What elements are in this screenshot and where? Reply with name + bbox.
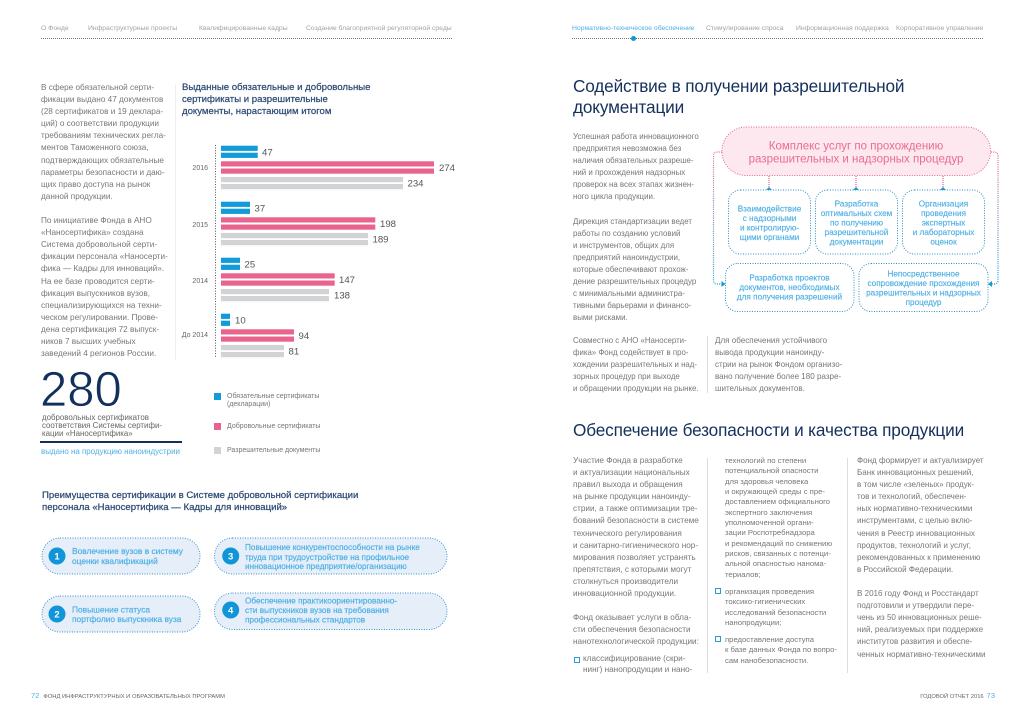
text column: safety part 1: классифицирование (скри- (583, 654, 685, 662)
legend (214, 392, 320, 454)
text column: safety part 3: Банк инновационных решений, (857, 468, 974, 477)
text column: safety part 1: мирования позволяет устранять (573, 553, 696, 562)
pill 4: сти выпускников вузов на требования (245, 606, 389, 615)
pill 4: 4 (228, 606, 234, 616)
box: interaction: Взаимодействие (738, 204, 802, 214)
bars: 2014: 138 (334, 290, 350, 302)
callout description: добровольных сертификатов (42, 413, 149, 422)
legend: Разрешительные документы (227, 446, 320, 454)
pill 3 (214, 538, 447, 574)
bars: 2014: 147 (339, 275, 355, 286)
box: interaction: и контролирую- (740, 224, 799, 232)
text block: joint work: зорных процедур при выходе (573, 372, 680, 381)
pill 2: Повышение статуса (72, 604, 150, 614)
text column: safety part 2: териалов; (725, 570, 761, 579)
text column: safety part 2: для здоровья человека (725, 477, 808, 486)
bars: 2016: 47 (262, 148, 273, 158)
text block: permit intro: тивными барьерами и финансо- (573, 301, 691, 310)
navigation: left page sections: Инфраструктурные проекты (88, 25, 177, 32)
callout description: кации «Наносертифика» (42, 429, 133, 438)
legend: (декларации) (227, 400, 270, 408)
text column: safety part 3: В 2016 году Фонд и Росстандарт (857, 589, 979, 598)
panel: right page (572, 25, 999, 700)
diagram: services complex (712, 126, 999, 312)
pill 4 (214, 593, 447, 630)
box: interaction: с надзорными (743, 214, 796, 223)
text block: certification intro: параметры безопасности и даю- (41, 168, 165, 177)
box: optimal schemes: по получению (830, 218, 883, 228)
pill 4: Обеспечение практикоориентированно- (245, 596, 397, 606)
box: expert evaluation: и лабораторных (913, 228, 974, 237)
text column: safety part 1: технического регулирования (573, 529, 682, 538)
navigation: left page sections: О Фонде (41, 25, 69, 32)
text block: permits obtained (715, 336, 842, 393)
text block: permit intro: ний и прохождения надзорных (573, 168, 685, 177)
box: direct support: Непосредственное (887, 270, 960, 278)
bars: before 2014 (182, 314, 310, 358)
text column: safety part 3: чень из 50 инновационных реше- (857, 613, 982, 622)
bars: 2016 (192, 146, 456, 190)
text block: permit intro: проверок на всех этапах жизнен- (573, 180, 694, 189)
pill 3: инновационное предприятие/организацию (245, 562, 407, 571)
text block: certification intro: щих право доступа на рынок (41, 180, 150, 189)
text block: certification intro: данной продукции. (41, 192, 113, 201)
text block: certification intro: фикации персонала «Наносерти- (41, 252, 168, 261)
text block: permit intro (573, 132, 699, 322)
callout description (42, 413, 162, 438)
text column: safety part 3: ченных нормативно-техническими (857, 650, 985, 658)
box: expert evaluation: оценок (930, 238, 957, 246)
text column: safety part 1: нанотехнологической продукции: (573, 637, 699, 646)
text column: safety part 2: организация проведения (725, 587, 814, 596)
box: services complex title (722, 127, 990, 176)
text column: safety part 1: правил выхода и обращения (573, 480, 683, 489)
text column: safety part 2: и рекомендаций по снижению (725, 539, 832, 548)
text column: safety part 1: препятствия, с которыми могут (573, 565, 691, 574)
text block: permits obtained: стрии на рынок Фондом организо- (715, 360, 842, 369)
pill 3: 3 (228, 552, 233, 562)
navigation: left page sections: Квалифицированные кадры (199, 25, 288, 32)
text block: certification intro: По инициативе Фонда в АНО (41, 216, 152, 225)
pill 1 (42, 538, 200, 574)
text column: safety part 2: к базе данных Фонда по вопро- (725, 645, 837, 654)
bars: 2014 (192, 258, 355, 302)
bars: 2015: 2015 (192, 222, 208, 229)
footer: left page number: 72 ФОНД ИНФРАСТРУКТУРНЫХ И ОБРАЗОВАТЕЛЬНЫХ ПРОГРАММ (31, 691, 225, 700)
connector: left side (714, 152, 726, 287)
box: expert evaluation: Организация (919, 200, 968, 208)
box: optimal schemes: разрешительной (825, 228, 888, 237)
text column: safety part 1 (573, 456, 699, 674)
heading: certification advantages (42, 490, 358, 513)
box: direct support: сопровождение прохождения (868, 279, 979, 288)
bars: before 2014: 81 (288, 346, 299, 358)
text column: safety part 3: рекомендованных к применению (857, 553, 980, 562)
callout note: выдано на продукцию наноиндустрии (41, 447, 180, 456)
box: direct support: процедур (906, 298, 942, 307)
text block: certification intro: ческом регулировании. Прове- (41, 313, 158, 322)
text column: safety part 2: предоставление доступа (725, 635, 814, 644)
text column: safety part 1: Участие Фонда в разработке (573, 456, 683, 465)
bars: 2015: 189 (372, 234, 389, 246)
navigation: left page sections (41, 25, 452, 39)
text block: permits obtained: вано получение более 180 разре- (715, 372, 841, 381)
box: optimal schemes: Разработка (835, 200, 879, 208)
text block: permit intro: работы по созданию условий (573, 229, 680, 238)
text block: certification intro: ментов Таможенного союза, (41, 143, 149, 152)
legend: Обязательные сертификаты (227, 392, 319, 400)
heading: permit documentation (573, 76, 904, 117)
text column: safety part 2: токсико-гигиенических (725, 597, 805, 606)
box: interaction: щими органами (740, 233, 799, 242)
text block: permit intro: Успешная работа инновационного (573, 132, 699, 141)
text column: safety part 3: в том числе «зеленых» продук- (857, 480, 974, 489)
bars: 2016: 274 (439, 163, 456, 174)
bar chart: issued documents by year (182, 145, 456, 358)
text block: permit intro: ного цикла продукции. (573, 192, 655, 201)
panel: left page (31, 25, 456, 700)
text block: certification intro: фикация выпускников вузов, (41, 289, 150, 298)
box: draft documents: документов, необходимых (739, 283, 840, 292)
text block: permits obtained: шительных документов. (715, 384, 805, 393)
text column: safety part 1: на рынке продукции наноинду- (573, 492, 691, 501)
connector: right side (988, 152, 998, 287)
text block: joint work (573, 336, 699, 393)
text block: certification intro: фика — Кадры для инноваций». (41, 264, 164, 273)
text column: safety part 3: продуктов, технологий и услуг, (857, 541, 971, 550)
box: direct support (859, 264, 988, 312)
navigation: right page sections: Информационная поддержка (796, 25, 889, 32)
text block: certification intro: Система добровольной серти- (41, 240, 157, 249)
connectors: top arrows (766, 176, 946, 190)
box: services complex title: Комплекс услуг по прохождению (769, 140, 944, 152)
text column: safety part 3: тов и технологий, обеспечен- (857, 492, 966, 501)
navigation: right page sections: Корпоративное управление (896, 25, 983, 32)
bars: 2014: 2014 (192, 278, 208, 285)
text column: safety part 3 (857, 456, 985, 658)
text column: safety part 2: сам нанобезопасности. (725, 656, 808, 665)
bars: 2015 (192, 202, 396, 246)
text column: safety part 2: нанопродукции; (725, 618, 781, 627)
bars: before 2014: 94 (298, 331, 310, 342)
text block: certification intro: На ее базе проводится серти- (41, 276, 155, 286)
box: services complex title: разрешительных и надзорных процедур (749, 154, 963, 166)
callout: 280 certificates (40, 363, 182, 456)
text block: certification intro: требованиям технических регла- (41, 131, 166, 140)
text column: safety part 2 (715, 456, 837, 665)
text block: permit intro: выми рисками. (573, 313, 628, 322)
text column: safety part 1: столкнуться производители (573, 577, 678, 586)
heading: permit documentation: документации (573, 97, 684, 117)
text column: safety part 1: стрии, а также оптимизации тре- (573, 504, 698, 513)
heading: safety and quality: Обеспечение безопасности и качества продукции (573, 420, 964, 440)
text column: safety part 2: доставлением официального (725, 497, 830, 506)
text block: permit intro: наличия обязательных разреше- (573, 156, 694, 165)
bars: before 2014: До 2014 (182, 332, 208, 339)
text block: joint work: Совместно с АНО «Наносерти- (573, 336, 687, 345)
text block: certification intro: «Наносертифика» создана (41, 228, 144, 237)
navigation: right page sections (572, 25, 983, 41)
text column: safety part 3: подготовили и утвердили пере- (857, 601, 974, 610)
callout description: соответствия Системы сертифи- (42, 421, 162, 430)
pill 1: оценки квалификаций (72, 556, 158, 566)
text block: permit intro: Дирекция стандартизации ведет (573, 217, 692, 226)
box: expert evaluation: проведения (921, 209, 966, 218)
pill 3: труда при трудоустройстве на профильное (245, 553, 410, 562)
pill 2: портфолио выпускника вуза (72, 614, 182, 624)
text block: permit intro: предприятий наноиндустрии, (573, 253, 680, 262)
text block: certification intro: фикации выдано 47 документов (41, 95, 163, 104)
text column: safety part 1: инновационной продукции. (573, 589, 676, 598)
box: direct support: разрешительных и надзорных (866, 288, 981, 298)
box: optimal schemes: оптимальных схем (821, 209, 893, 218)
text column: safety part 2: зации Роспотребнадзора (725, 528, 815, 537)
text block: certification intro: ций) о соответствии продукции (41, 119, 159, 128)
text block: permit intro: и инструментов, общих для (573, 241, 674, 250)
text column: safety part 2: рисков, связанных с потенци- (725, 549, 831, 558)
box: draft documents: для получения разрешений (737, 292, 842, 302)
bars: before 2014: 10 (235, 316, 246, 326)
text block: permit intro: дение разрешительных процедур (573, 277, 696, 286)
text column: safety part 1: бований безопасности в системе (573, 516, 699, 525)
text block: certification intro: В сфере обязательной серти- (41, 83, 154, 92)
text column: safety part 2: и окружающей среды с пре- (725, 487, 825, 496)
text column: safety part 1: и санитарно-гигиенического нор- (573, 541, 698, 550)
text block: certification intro: дена сертификация 72 выпуск- (41, 325, 159, 334)
text block: certification intro: специализирующихся на техни- (41, 301, 162, 310)
text block: joint work: фика» Фонд содействует в про- (573, 348, 688, 357)
chart title: сертификаты и разрешительные (182, 94, 328, 105)
text column: safety part 3: ний, реализуемых при поддержке (857, 625, 983, 634)
text column: safety part 2: технологий по степени (725, 456, 806, 465)
text block: certification intro (41, 83, 168, 358)
box: draft documents (726, 264, 854, 312)
navigation: right page sections: Стимулирование спроса (706, 25, 784, 32)
text block: permit intro: предприятия невозможна без (573, 144, 681, 153)
text column: safety part 2: исследований безопасности (725, 608, 826, 617)
pill 2 (42, 596, 200, 632)
pill 4: профессиональных стандартов (245, 616, 365, 624)
box: optimal schemes (816, 190, 898, 254)
bars: 2015: 198 (380, 219, 396, 230)
text column: safety part 1: сти обеспечения безопасности (573, 625, 691, 634)
pill 2: 2 (54, 610, 60, 620)
text block: permits obtained: Для обеспечения устойчивого (715, 336, 827, 345)
box: expert evaluation: экспертных (922, 218, 965, 228)
heading: certification advantages: персонала «Наносертифика — Кадры для инноваций» (42, 502, 287, 513)
text block: certification intro: заведений 4 регионов России. (41, 349, 156, 358)
text column: safety part 1: и актуализации национальных (573, 468, 690, 477)
text column: safety part 2: альной опасностью нанома- (725, 559, 826, 568)
navigation: right page sections: Нормативно-техническое обеспечение (572, 25, 695, 32)
pill 3: Повышение конкурентоспособности на рынке (245, 543, 420, 552)
text column: safety part 3: инструментами, с целью вклю- (857, 516, 972, 525)
box: interaction (728, 190, 810, 254)
chart title (182, 82, 371, 117)
chart title: документы, нарастающим итогом (182, 106, 331, 117)
box: expert evaluation (902, 190, 984, 254)
heading: permit documentation: Содействие в получении разрешительной (573, 76, 904, 96)
pill 1: 1 (54, 552, 60, 562)
text block: permit intro: которые обеспечивают прохож- (573, 265, 688, 274)
bars: 2016: 234 (408, 178, 424, 190)
text block: certification intro: подтверждающих обязательные (41, 156, 164, 165)
text column: safety part 1: Фонд оказывает услуги в обла- (573, 613, 691, 622)
box: draft documents: Разработка проектов (749, 274, 830, 282)
box: optimal schemes: документации (830, 238, 883, 246)
bars: 2015: 37 (254, 204, 265, 214)
text column: safety part 3: ных нормативно-техническими (857, 504, 972, 513)
heading: certification advantages: Преимущества сертификации в Системе добровольной сертификации (42, 490, 358, 501)
text block: joint work: и обращении продукции на рынке. (573, 384, 699, 393)
advantages: pills (42, 538, 448, 632)
footer: right page number: ГОДОВОЙ ОТЧЕТ 2016 73 (920, 691, 995, 700)
text column: safety part 2: уполномоченной органи- (725, 518, 814, 527)
bars: 2016: 2016 (192, 165, 208, 172)
text block: joint work: хождении разрешительных и над- (573, 360, 697, 369)
text block: permits obtained: вывода продукции наноинду- (715, 348, 824, 357)
text column: safety part 3: институтов развития и обеспе- (857, 637, 972, 646)
navigation: left page sections: Создание благоприятной регуляторной среды (306, 25, 452, 32)
text column: safety part 3: Фонд формирует и актуализирует (857, 456, 984, 465)
text column: safety part 3: в Российской Федерации. (857, 565, 953, 574)
text column: safety part 3: чения в Реестр инновационных (857, 529, 975, 538)
text column: safety part 2: экспертного заключения (725, 508, 812, 517)
big number: 280 (40, 363, 122, 417)
text block: certification intro: (28 сертификатов и 19 деклара- (41, 107, 163, 116)
text block: certification intro: ников 7 высших учебных (41, 337, 136, 346)
pill 1: Вовлечение вузов в систему (72, 546, 184, 556)
text column: safety part 1: нинг) нанопродукции и нано- (583, 665, 692, 674)
chart title: Выданные обязательные и добровольные (182, 82, 371, 93)
text column: safety part 2: потенциальной опасности (725, 466, 818, 475)
bars: 2014: 25 (244, 260, 255, 270)
legend: Добровольные сертификаты (227, 423, 320, 430)
text block: permit intro: с минимальными администра- (573, 289, 685, 298)
